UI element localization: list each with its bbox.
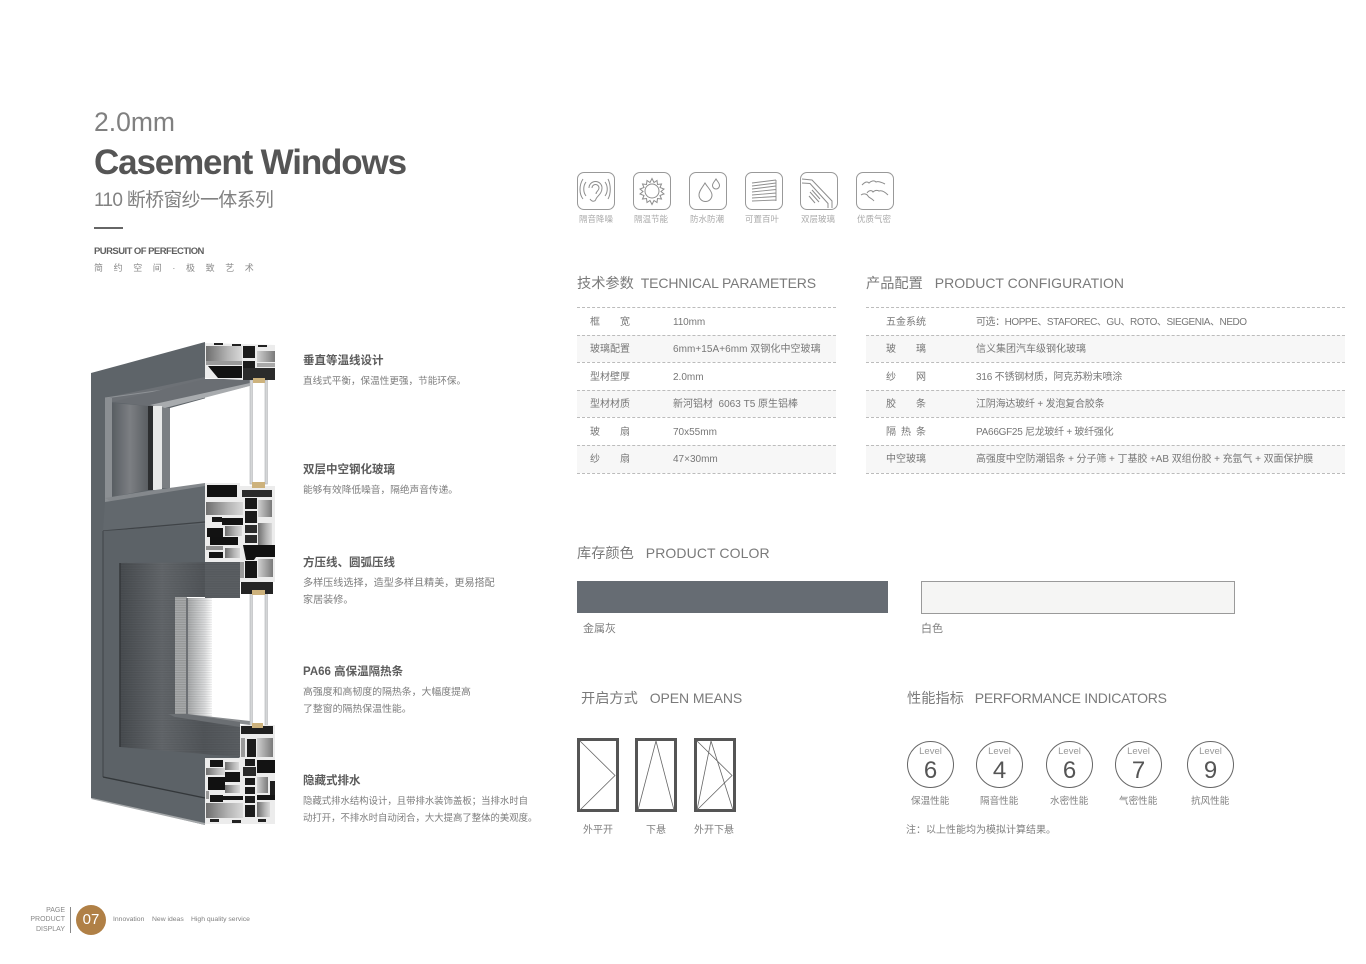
- swatch: metal grey: [577, 581, 888, 613]
- label: bottom hung: 下悬: [646, 824, 666, 836]
- feature: PA66 thermal strip: PA66 高保温隔热条: [303, 666, 403, 678]
- table: product configuration: PA66GF25 尼龙玻纤 + 玻纤强化: [976, 426, 1113, 438]
- table: product configuration: 胶: [886, 399, 896, 410]
- bottom frame line: [103, 777, 205, 798]
- caption: air: 优质气密: [857, 214, 891, 224]
- footer: slogans: High quality service: [191, 916, 250, 923]
- feature: bead lines: [303, 556, 495, 606]
- sash: [103, 522, 240, 798]
- caption: heat: 隔温节能: [634, 214, 668, 224]
- icon: sound insulation: [577, 172, 615, 210]
- table: product configuration: 纱: [886, 372, 896, 382]
- frame face: [91, 342, 205, 825]
- lower glass: [175, 597, 250, 722]
- heading rule: [94, 227, 123, 228]
- table: technical parameters: 宽: [620, 316, 630, 328]
- feature: double glazing: 能够有效降低噪音，隔绝声音传递。: [303, 485, 458, 496]
- footer: slogans: Innovation: [113, 916, 144, 923]
- table: technical parameters: 110mm: [673, 316, 705, 328]
- icon: airtight: [856, 172, 894, 210]
- glass panes: [250, 380, 267, 726]
- table: product configuration: 江阴海达玻纤 + 发泡复合胶条: [976, 399, 1104, 410]
- table: technical parameters: [577, 307, 836, 474]
- caption: water: 水密性能: [1050, 796, 1088, 807]
- table: technical parameters: 玻璃配置: [590, 344, 630, 355]
- heading: product configuration: 产品配置 PRODUCT CONFIGURATION: [866, 275, 1124, 292]
- icon: side and bottom hung: [694, 738, 736, 812]
- feature: hidden drainage: 动打开，不排水时自动闭合，大大提高了整体的美观度。: [303, 812, 537, 822]
- swatch: white: [921, 581, 1235, 614]
- icon: blinds: [745, 172, 783, 210]
- footer: page label: PAGE: [46, 906, 65, 914]
- mesh face below mid profile: [205, 562, 240, 598]
- feature: bead lines: 家居装修。: [303, 594, 353, 606]
- table: technical parameters: 47×30mm: [673, 454, 718, 465]
- feature: PA66 thermal strip: 了整窗的隔热保温性能。: [303, 704, 412, 714]
- table: product configuration: 热: [901, 426, 911, 438]
- level: air: [1115, 741, 1162, 788]
- table: technical parameters: 型材材质: [590, 399, 630, 410]
- caption: air: 气密性能: [1119, 796, 1157, 807]
- table: product configuration: 316 不锈钢材质，阿克苏粉末喷涂: [976, 372, 1122, 382]
- icon row: [577, 172, 894, 210]
- footer: page number badge: [76, 905, 106, 935]
- footer: slogans: New ideas: [152, 916, 184, 923]
- icon: side hung: [577, 738, 619, 812]
- table: product configuration: 网: [916, 372, 926, 382]
- level: sound: Level: [988, 746, 1011, 757]
- label: white: 白色: [921, 623, 943, 635]
- table: product configuration: 中空玻璃: [886, 454, 926, 465]
- table: product configuration: 玻: [886, 344, 896, 355]
- level: water: 6: [1063, 757, 1076, 784]
- level: wind: [1187, 741, 1234, 788]
- level: sound: [976, 741, 1023, 788]
- table: product configuration: 高强度中空防潮铝条 + 分子筛 + 丁基胶 +AB 双组份胶 + 充氩气 + 双面保护膜: [976, 454, 1313, 465]
- feature: double glazing: [303, 463, 458, 496]
- feature: upright insulation: [303, 354, 466, 387]
- window cross-section illustration: [91, 342, 275, 825]
- label: side hung: 外平开: [583, 824, 613, 836]
- footer: slogans: [113, 916, 250, 923]
- heading: product color: 库存颜色 PRODUCT COLOR: [577, 545, 770, 562]
- level: thermal: 6: [924, 757, 937, 784]
- footer divider: [70, 907, 71, 933]
- note: 注：以上性能均为模拟计算结果。: [906, 824, 1056, 836]
- feature: hidden drainage: 隐藏式排水结构设计，且带排水装饰盖板；当排水时自: [303, 796, 528, 806]
- table: technical parameters: 新河铝材 6063 T5 原生铝棒: [673, 399, 798, 410]
- feature: PA66 thermal strip: [303, 665, 471, 714]
- icon: bottom hung: [635, 738, 677, 812]
- level: wind: 9: [1204, 757, 1217, 784]
- tagline chinese: 简约空间·极致艺术: [94, 263, 264, 273]
- footer: page label: [30, 906, 65, 932]
- level: wind: Level: [1199, 746, 1222, 757]
- caption: thermal: 保温性能: [911, 796, 949, 807]
- level: sound: 4: [993, 757, 1006, 784]
- footer: page label: DISPLAY: [36, 926, 65, 932]
- caption: wind: 抗风性能: [1191, 796, 1229, 807]
- feature: bead lines: 方压线、圆弧压线: [303, 557, 395, 569]
- caption: sound: 隔音降噪: [579, 214, 613, 224]
- feature: upright insulation: 直线式平衡，保温性更强，节能环保。: [303, 376, 466, 387]
- level: air: Level: [1127, 746, 1150, 757]
- footer: page label: PRODUCT: [30, 916, 65, 923]
- lower profile: [205, 723, 275, 824]
- feature: PA66 thermal strip: 高强度和高韧度的隔热条，大幅度提高: [303, 686, 471, 698]
- table: product configuration: 条: [916, 399, 926, 410]
- table: product configuration: 信义集团汽车级钢化玻璃: [976, 344, 1086, 355]
- upper profile: [205, 343, 275, 383]
- level: thermal: Level: [919, 746, 942, 757]
- upper reveal: [105, 398, 112, 502]
- tagline english: PURSUIT OF PERFECTION: [94, 246, 204, 257]
- icon: double glazing: [800, 172, 838, 210]
- feature: bead lines: 多样压线选择，造型多样且精美，更易搭配: [303, 578, 495, 588]
- table: product configuration: 璃: [916, 344, 926, 355]
- label: metal grey: 金属灰: [583, 623, 616, 635]
- caption: glass: 双层玻璃: [801, 214, 835, 224]
- level: water: [1046, 741, 1093, 788]
- caption: sound: 隔音性能: [980, 796, 1018, 807]
- sill: [105, 483, 205, 502]
- feature: hidden drainage: 隐藏式排水: [303, 775, 360, 787]
- table: technical parameters: 玻: [590, 426, 600, 438]
- table: product configuration: [866, 307, 1345, 474]
- table: technical parameters: 框: [590, 316, 600, 328]
- label: side and bottom hung: 外开下悬: [694, 824, 734, 836]
- subtitle: 110 断桥窗纱一体系列: [94, 190, 273, 211]
- caption: blinds: 可置百叶: [745, 214, 779, 224]
- heading: thickness: 2.0mm: [94, 107, 175, 137]
- table: technical parameters: 扇: [620, 426, 630, 438]
- caption: water: 防水防潮: [690, 214, 724, 224]
- table: technical parameters: 纱: [590, 454, 600, 465]
- feature: hidden drainage: [303, 774, 537, 822]
- level: air: 7: [1132, 757, 1145, 784]
- table: technical parameters: 70x55mm: [673, 426, 717, 438]
- table: product configuration: 隔: [886, 426, 896, 438]
- icon: thermal insulation: [633, 172, 671, 210]
- table: technical parameters: 2.0mm: [673, 372, 704, 382]
- level: water: Level: [1058, 746, 1081, 757]
- table: technical parameters: 6mm+15A+6mm 双钢化中空玻璃: [673, 344, 821, 355]
- table: product configuration: 可选：HOPPE、STAFOREC、GU、ROTO、SIEGENIA、NEDO: [976, 316, 1247, 328]
- heading: performance indicators: 性能指标 PERFORMANCE INDICATORS: [907, 690, 1167, 707]
- feature: upright insulation: 垂直等温线设计: [303, 355, 384, 367]
- title: Casement Windows: [94, 143, 406, 182]
- footer: page number badge: 07: [83, 911, 99, 928]
- table: technical parameters: 型材壁厚: [590, 372, 630, 382]
- heading: technical parameters: 技术参数 TECHNICAL PARAMETERS: [577, 275, 816, 292]
- feature: double glazing: 双层中空钢化玻璃: [303, 464, 395, 476]
- table: product configuration: 五金系统: [886, 316, 926, 328]
- table: product configuration: 条: [916, 426, 926, 438]
- table: technical parameters: 扇: [620, 454, 630, 465]
- heading: open means: 开启方式 OPEN MEANS: [581, 690, 742, 707]
- icon: waterproof: [689, 172, 727, 210]
- middle profile: [205, 482, 275, 598]
- level: thermal: [907, 741, 954, 788]
